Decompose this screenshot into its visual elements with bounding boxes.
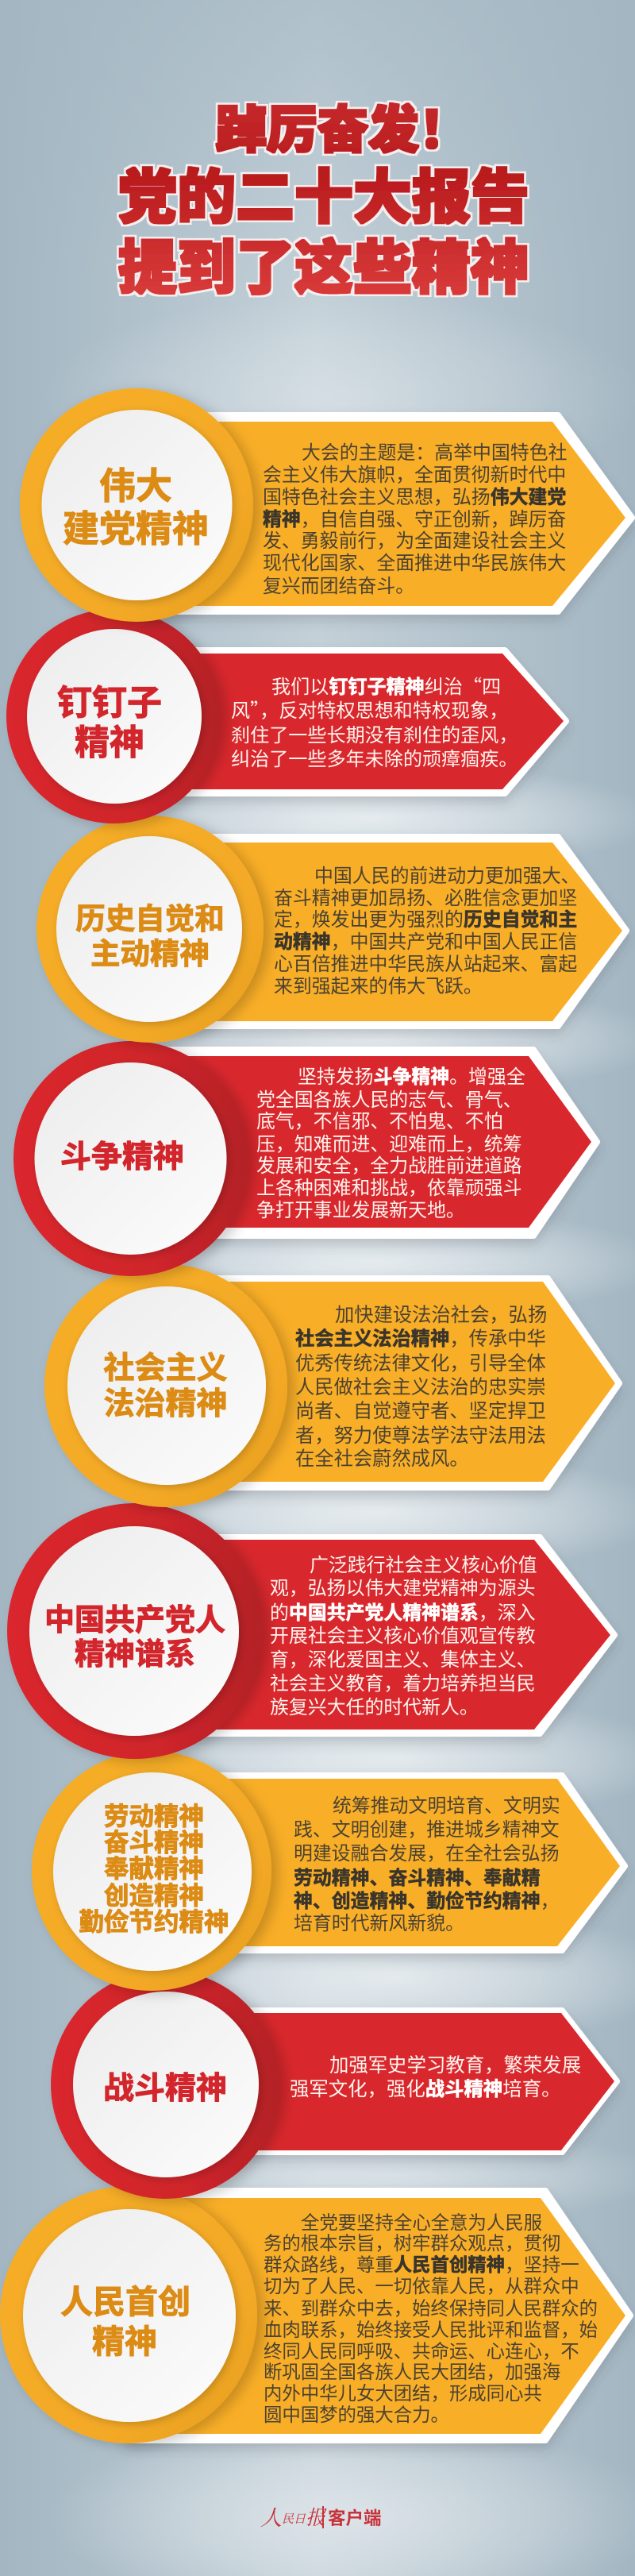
body text 4: 底气，不信邪、不怕鬼、不怕 [256, 1105, 503, 1133]
body text 1: 会主义伟大旗帜，全面贯彻新时代中 [263, 459, 566, 487]
badge title 5: 社会主义 [103, 1344, 228, 1388]
body text 5: 人民做社会主义法治的忠实崇 [295, 1371, 546, 1399]
badge title 7: 劳动精神 [104, 1796, 204, 1833]
body text 3: 来到强起来的伟大飞跃。 [274, 970, 483, 998]
title: 踔厉奋发！ [216, 102, 470, 159]
badge title 6: 精神谱系 [75, 1629, 195, 1673]
panel 5: 社会主义法治精神 [44, 1264, 619, 1507]
ribbon 5 [166, 1278, 619, 1487]
body text 7: 培育时代新风新貌。 [294, 1907, 464, 1935]
body text 8: 强军文化，强化战斗精神培育。 [290, 2074, 561, 2102]
panel 2: 钉钉子精神 [6, 609, 566, 823]
body text 7: 明建设融合发展，在全社会弘扬 [294, 1838, 559, 1865]
badge title 7: 奉献精神 [104, 1849, 204, 1885]
body text 5: 在全社会蔚然成风。 [295, 1443, 469, 1471]
body text 7: 践、文明创建，推进城乡精神文 [294, 1814, 560, 1841]
body text 1: 精神，自信自强、守正创新，踔厉奋 [263, 503, 566, 531]
body text 8: 加强军史学习教育，繁荣发展 [329, 2050, 581, 2078]
badge title 4: 斗争精神 [60, 1132, 184, 1177]
badge 8 [51, 1970, 279, 2199]
panel 6: 中国共产党人精神谱系 [7, 1503, 614, 1759]
title [118, 102, 529, 301]
ribbon 8 [165, 2011, 617, 2152]
ribbon 4 [131, 1050, 597, 1236]
badge title 3: 历史自觉和 [75, 894, 225, 938]
badge title 7: 创造精神 [104, 1876, 204, 1912]
body text 3: 奋斗精神更加昂扬、必胜信念更加坚 [274, 882, 577, 910]
badge 4 [13, 1041, 248, 1276]
badge 3 [37, 816, 264, 1043]
body text 3: 动精神，中国共产党和中国人民正信 [274, 926, 577, 954]
body text 2: 风”，反对特权思想和特权现象， [231, 695, 508, 723]
body text 3: 中国人民的前进动力更加强大、 [314, 860, 579, 888]
body text 9: 务的根本宗旨，树牢群众观点，贯彻 [264, 2228, 560, 2255]
badge title 6: 中国共产党人 [44, 1595, 225, 1639]
badge title 7: 勤俭节约精神 [79, 1902, 229, 1938]
body text 1: 现代化国家、全面推进中华民族伟大 [263, 547, 566, 575]
badge title 1: 伟大 [99, 457, 172, 510]
body text 1: 发、勇毅前行，为全面建设社会主义 [263, 525, 566, 553]
body text 7: 神、创造精神、勤俭节约精神， [294, 1885, 559, 1913]
badge title 7: 奋斗精神 [104, 1822, 204, 1859]
footer logo: 客户端 [328, 2508, 382, 2528]
body text 9: 圆中国梦的强大合力。 [264, 2400, 449, 2427]
body text 9: 终同人民同呼吸、共命运、心连心，不 [264, 2336, 579, 2363]
body text 9: 内外中华儿女大团结，形成同心共 [264, 2378, 542, 2405]
body text 3: 定，焕发出更为强烈的历史自觉和主 [274, 904, 577, 931]
badge title 9: 精神 [92, 2315, 157, 2362]
ribbon 3 [150, 837, 626, 1026]
body text 9: 断巩固全国各族人民大团结，加强海 [264, 2357, 560, 2384]
panel 3: 历史自觉和主动精神 [37, 816, 626, 1043]
panel 8: 战斗精神 [51, 1970, 617, 2199]
body text 2: 纠治了一些多年未除的顽瘴痼疾。 [231, 743, 518, 771]
badge title 1: 建党精神 [63, 500, 209, 553]
body text 7: 统筹推动文明培育、文明实 [333, 1790, 560, 1818]
body text 4: 党全国各族人民的志气、骨气、 [256, 1084, 521, 1112]
badge title 2: 钉钉子 [57, 674, 162, 725]
panel 1: 伟大建党精神 [20, 388, 632, 622]
body text 5: 者，努力使尊法学法守法用法 [295, 1420, 546, 1448]
badge title 9: 人民首创 [60, 2275, 190, 2323]
ribbon 7 [151, 1776, 625, 1950]
body text 9: 来、到群众中去，始终保持同人民群众的 [264, 2293, 598, 2320]
body text 1: 国特色社会主义思想，弘扬伟大建党 [263, 481, 566, 509]
body text 6: 广泛践行社会主义核心价值 [310, 1549, 537, 1577]
badge 1 [20, 388, 253, 622]
body text 6: 育，深化爱国主义、集体主义、 [270, 1644, 535, 1672]
title: 提到了这些精神 [118, 235, 529, 301]
title: 党的二十大报告 [118, 164, 529, 230]
badge title 3: 主动精神 [90, 929, 210, 973]
badge title 2: 精神 [75, 714, 144, 765]
body text 9: 血肉联系，始终接受人民批评和监督，始 [264, 2315, 598, 2342]
badge 2 [6, 609, 221, 823]
panel 4: 斗争精神 [13, 1041, 597, 1276]
body text 3: 心百倍推进中华民族从站起来、富起 [274, 948, 577, 976]
ribbon 1 [137, 415, 632, 611]
badge 6 [7, 1503, 263, 1759]
body text 4: 坚持发扬斗争精神。增强全 [298, 1061, 525, 1089]
body text 6: 开展社会主义核心价值观宣传教 [270, 1620, 536, 1648]
badge 5 [44, 1264, 287, 1507]
body text 6: 社会主义教育，着力培养担当民 [270, 1668, 535, 1695]
body text 1: 复兴而团结奋斗。 [263, 570, 414, 598]
body text 1: 大会的主题是：高举中国特色社 [302, 437, 567, 465]
footer logo: 报 [306, 2502, 327, 2531]
panel 7: 劳动精神等 [32, 1751, 625, 1991]
ribbon 6 [135, 1537, 614, 1733]
ribbon 2 [114, 650, 566, 793]
panel 9: 人民首创精神 [0, 2186, 630, 2443]
body text 5: 尚者、自觉遵守者、坚定捍卫 [295, 1395, 546, 1423]
ribbon 9 [127, 2191, 630, 2440]
badge 7 [32, 1751, 271, 1991]
body text 9: 切为了人民、一切依靠人民，从群众中 [264, 2271, 579, 2298]
body text 4: 争打开事业发展新天地。 [256, 1194, 465, 1222]
body text 7: 劳动精神、奋斗精神、奉献精 [294, 1862, 541, 1890]
badge title 5: 法治精神 [103, 1379, 228, 1424]
badge 9 [0, 2186, 257, 2443]
body text 9: 群众路线，尊重人民首创精神，坚持一 [264, 2250, 579, 2277]
body text 4: 发展和安全，全力战胜前进道路 [256, 1150, 522, 1178]
body text 4: 上各种困难和挑战，依靠顽强斗 [256, 1172, 521, 1200]
body text 5: 加快建设法治社会，弘扬 [335, 1299, 547, 1327]
body text 2: 刹住了一些长期没有刹住的歪风， [231, 719, 518, 747]
footer logo [260, 2501, 382, 2532]
body text 6: 的中国共产党人精神谱系，深入 [270, 1597, 536, 1625]
body text 6: 观，弘扬以伟大建党精神为源头 [270, 1572, 535, 1600]
footer logo: 人 [260, 2501, 282, 2532]
body text 9: 全党要坚持全心全意为人民服 [301, 2208, 542, 2235]
body text 5: 社会主义法治精神，传承中华 [295, 1323, 546, 1351]
body text 2: 我们以钉钉子精神纠治“四 [271, 671, 501, 699]
body text 5: 优秀传统法律文化，引导全体 [295, 1348, 546, 1375]
body text 6: 族复兴大任的时代新人。 [270, 1691, 479, 1719]
footer logo: 民日 [282, 2510, 306, 2527]
body text 4: 压，知难而进、迎难而上，统筹 [256, 1128, 521, 1156]
badge title 8: 战斗精神 [103, 2064, 227, 2108]
